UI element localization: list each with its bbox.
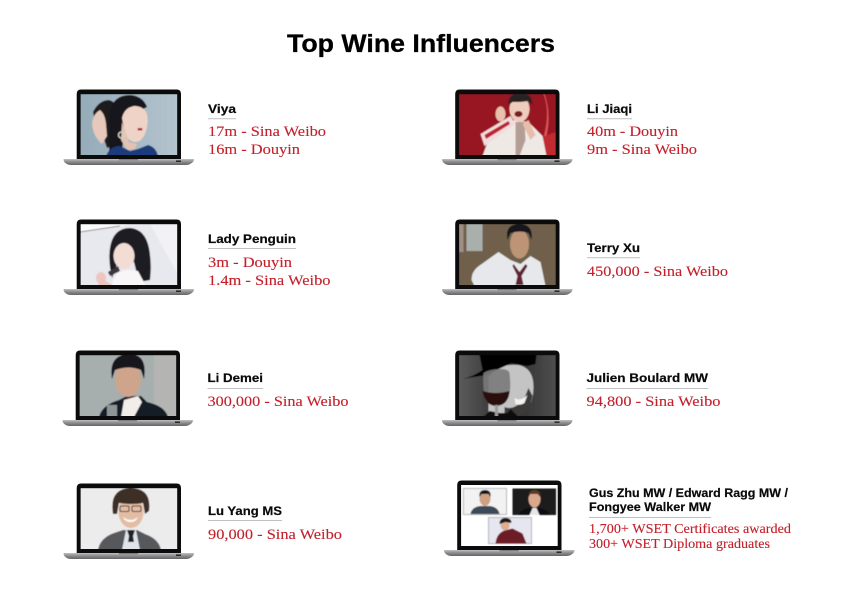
laptop: Julien Boulard MW [442, 350, 572, 426]
credentials: WSET educators: 1,700+ WSET Certificates awarded [589, 522, 791, 537]
followers: Li Jiaqi [587, 124, 697, 158]
panel: Li Demei [62, 350, 348, 426]
name: Terry Xu: Terry Xu [587, 241, 640, 255]
laptop: WSET educators [444, 480, 574, 556]
followers: Lu Yang MS: 90,000 - Sina Weibo [208, 527, 342, 543]
photo: Fongyee Walker [488, 518, 532, 544]
credentials: WSET educators: 300+ WSET Diploma graduates [589, 537, 770, 552]
panel: Terry Xu [442, 220, 728, 295]
names: WSET educators [589, 488, 789, 514]
panel: Li Jiaqi [442, 90, 697, 165]
followers: Lady Penguin [208, 255, 330, 289]
name: Viya: Viya [208, 102, 236, 116]
panel: Gus Zhu MW, Edward Ragg MW, Fongyee Walker MW [444, 480, 791, 556]
followers: Viya: 16m - Douyin [208, 142, 301, 158]
names: WSET educators: Fongyee Walker MW [589, 502, 711, 514]
name: Li Demei: Li Demei [208, 371, 263, 385]
laptop: Terry Xu [442, 220, 572, 295]
credentials: WSET educators [589, 522, 791, 552]
name: Julien Boulard MW: Julien Boulard MW [586, 371, 709, 385]
photo: Edward Ragg [512, 488, 556, 515]
followers: Julien Boulard MW: 94,800 - Sina Weibo [586, 394, 720, 410]
laptop: Lu Yang MS [64, 484, 194, 559]
laptop: Viya [64, 90, 194, 165]
followers: Terry Xu: 450,000 - Sina Weibo [587, 264, 728, 280]
name: Lu Yang MS: Lu Yang MS [208, 504, 282, 518]
followers: Viya [208, 124, 326, 158]
names: WSET educators: Gus Zhu MW / Edward Ragg MW / [589, 488, 789, 500]
followers: Viya: 17m - Sina Weibo [208, 124, 326, 140]
followers: Li Jiaqi: 9m - Sina Weibo [587, 142, 697, 158]
panel: Viya [64, 90, 326, 165]
panel: Lady Penguin [64, 220, 330, 295]
panel: Lu Yang MS [64, 484, 342, 559]
followers: Lady Penguin: 1.4m - Sina Weibo [208, 273, 330, 289]
photo: Gus Zhu [464, 488, 506, 514]
followers: Li Demei: 300,000 - Sina Weibo [208, 394, 348, 410]
title: Top Wine Influencers [287, 30, 555, 58]
laptop: Li Jiaqi [442, 90, 572, 165]
laptop: Li Demei [62, 350, 193, 426]
followers: Li Jiaqi: 40m - Douyin [587, 124, 679, 140]
name: Li Jiaqi: Li Jiaqi [587, 102, 632, 116]
name: Lady Penguin: Lady Penguin [208, 232, 296, 246]
panel: Julien Boulard MW [442, 350, 720, 426]
followers: Lady Penguin: 3m - Douyin [208, 255, 293, 271]
laptop: Lady Penguin [64, 220, 194, 295]
